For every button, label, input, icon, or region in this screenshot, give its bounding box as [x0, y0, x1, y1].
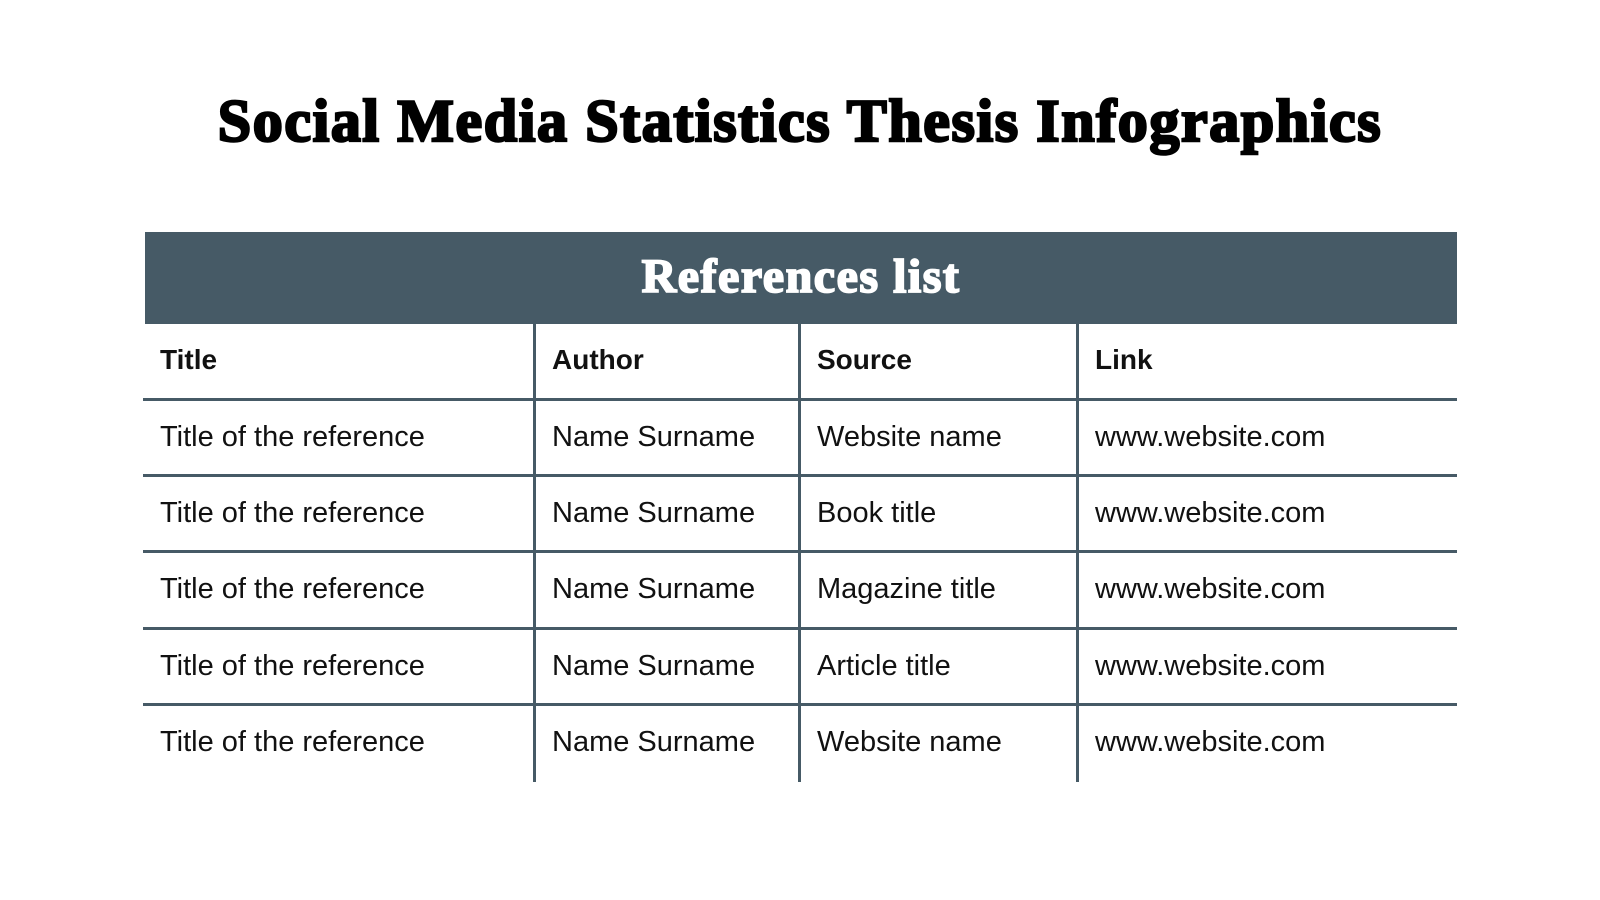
row 1: www.website.com	[1095, 421, 1325, 453]
row 2	[160, 497, 1325, 529]
row 2: Book title	[817, 497, 936, 529]
row 2: Title of the reference	[160, 497, 425, 529]
column headings: Title	[160, 344, 217, 375]
row 4: www.website.com	[1095, 650, 1325, 682]
row 3	[160, 573, 1325, 605]
row 3: Title of the reference	[160, 573, 425, 605]
row 1: Name Surname	[552, 421, 755, 453]
row 1: Title of the reference	[160, 421, 425, 453]
table header bar: References list	[642, 250, 960, 303]
table: references list	[143, 232, 1457, 782]
row 1	[160, 421, 1325, 453]
row 2: www.website.com	[1095, 497, 1325, 529]
column headings	[160, 344, 1153, 375]
column headings: Link	[1095, 344, 1153, 375]
title: Social Media Statistics Thesis Infographics	[218, 88, 1382, 154]
row 4: Title of the reference	[160, 650, 425, 682]
row 4: Name Surname	[552, 650, 755, 682]
row 5: Website name	[817, 726, 1002, 758]
row 1: Website name	[817, 421, 1002, 453]
row 4	[160, 650, 1325, 682]
row 3: Magazine title	[817, 573, 996, 605]
row 3: Name Surname	[552, 573, 755, 605]
table header bar	[145, 232, 1457, 324]
row 4: Article title	[817, 650, 951, 682]
row 5: www.website.com	[1095, 726, 1325, 758]
row 5	[160, 726, 1325, 758]
row 5: Title of the reference	[160, 726, 425, 758]
column headings: Source	[817, 344, 912, 375]
row 3: www.website.com	[1095, 573, 1325, 605]
row 5: Name Surname	[552, 726, 755, 758]
column headings: Author	[552, 344, 644, 375]
row 2: Name Surname	[552, 497, 755, 529]
